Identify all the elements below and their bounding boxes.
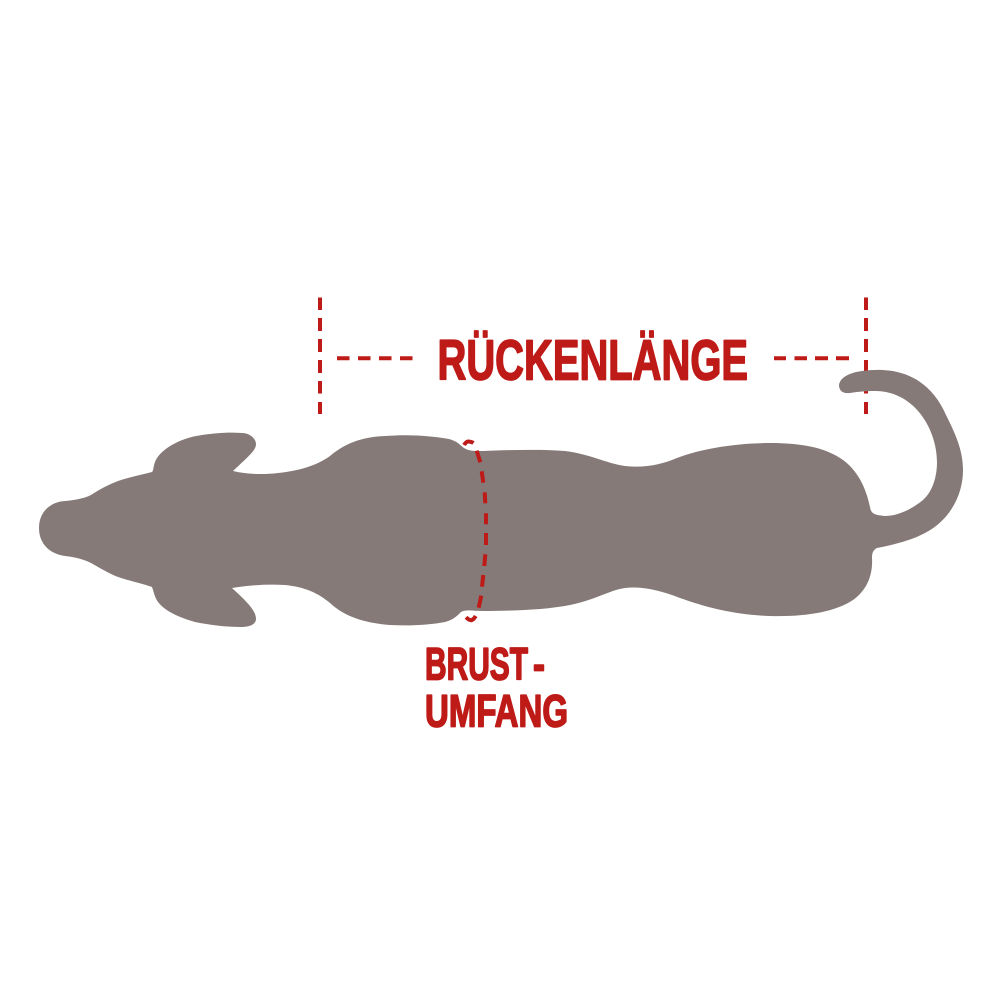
right measurement marker <box>864 298 868 414</box>
label: chest girth: - <box>533 638 545 690</box>
left measurement marker <box>318 298 322 414</box>
label: chest girth <box>425 638 568 736</box>
label: chest girth: BRUST <box>425 638 528 690</box>
right measurement dashes <box>774 356 849 360</box>
left measurement dashes <box>337 356 412 360</box>
label: back length: RÜCKENLÄNGE <box>438 328 748 392</box>
dog silhouette <box>39 370 963 627</box>
chest girth dashed line <box>464 441 486 620</box>
label: chest girth: UMFANG <box>425 686 568 736</box>
